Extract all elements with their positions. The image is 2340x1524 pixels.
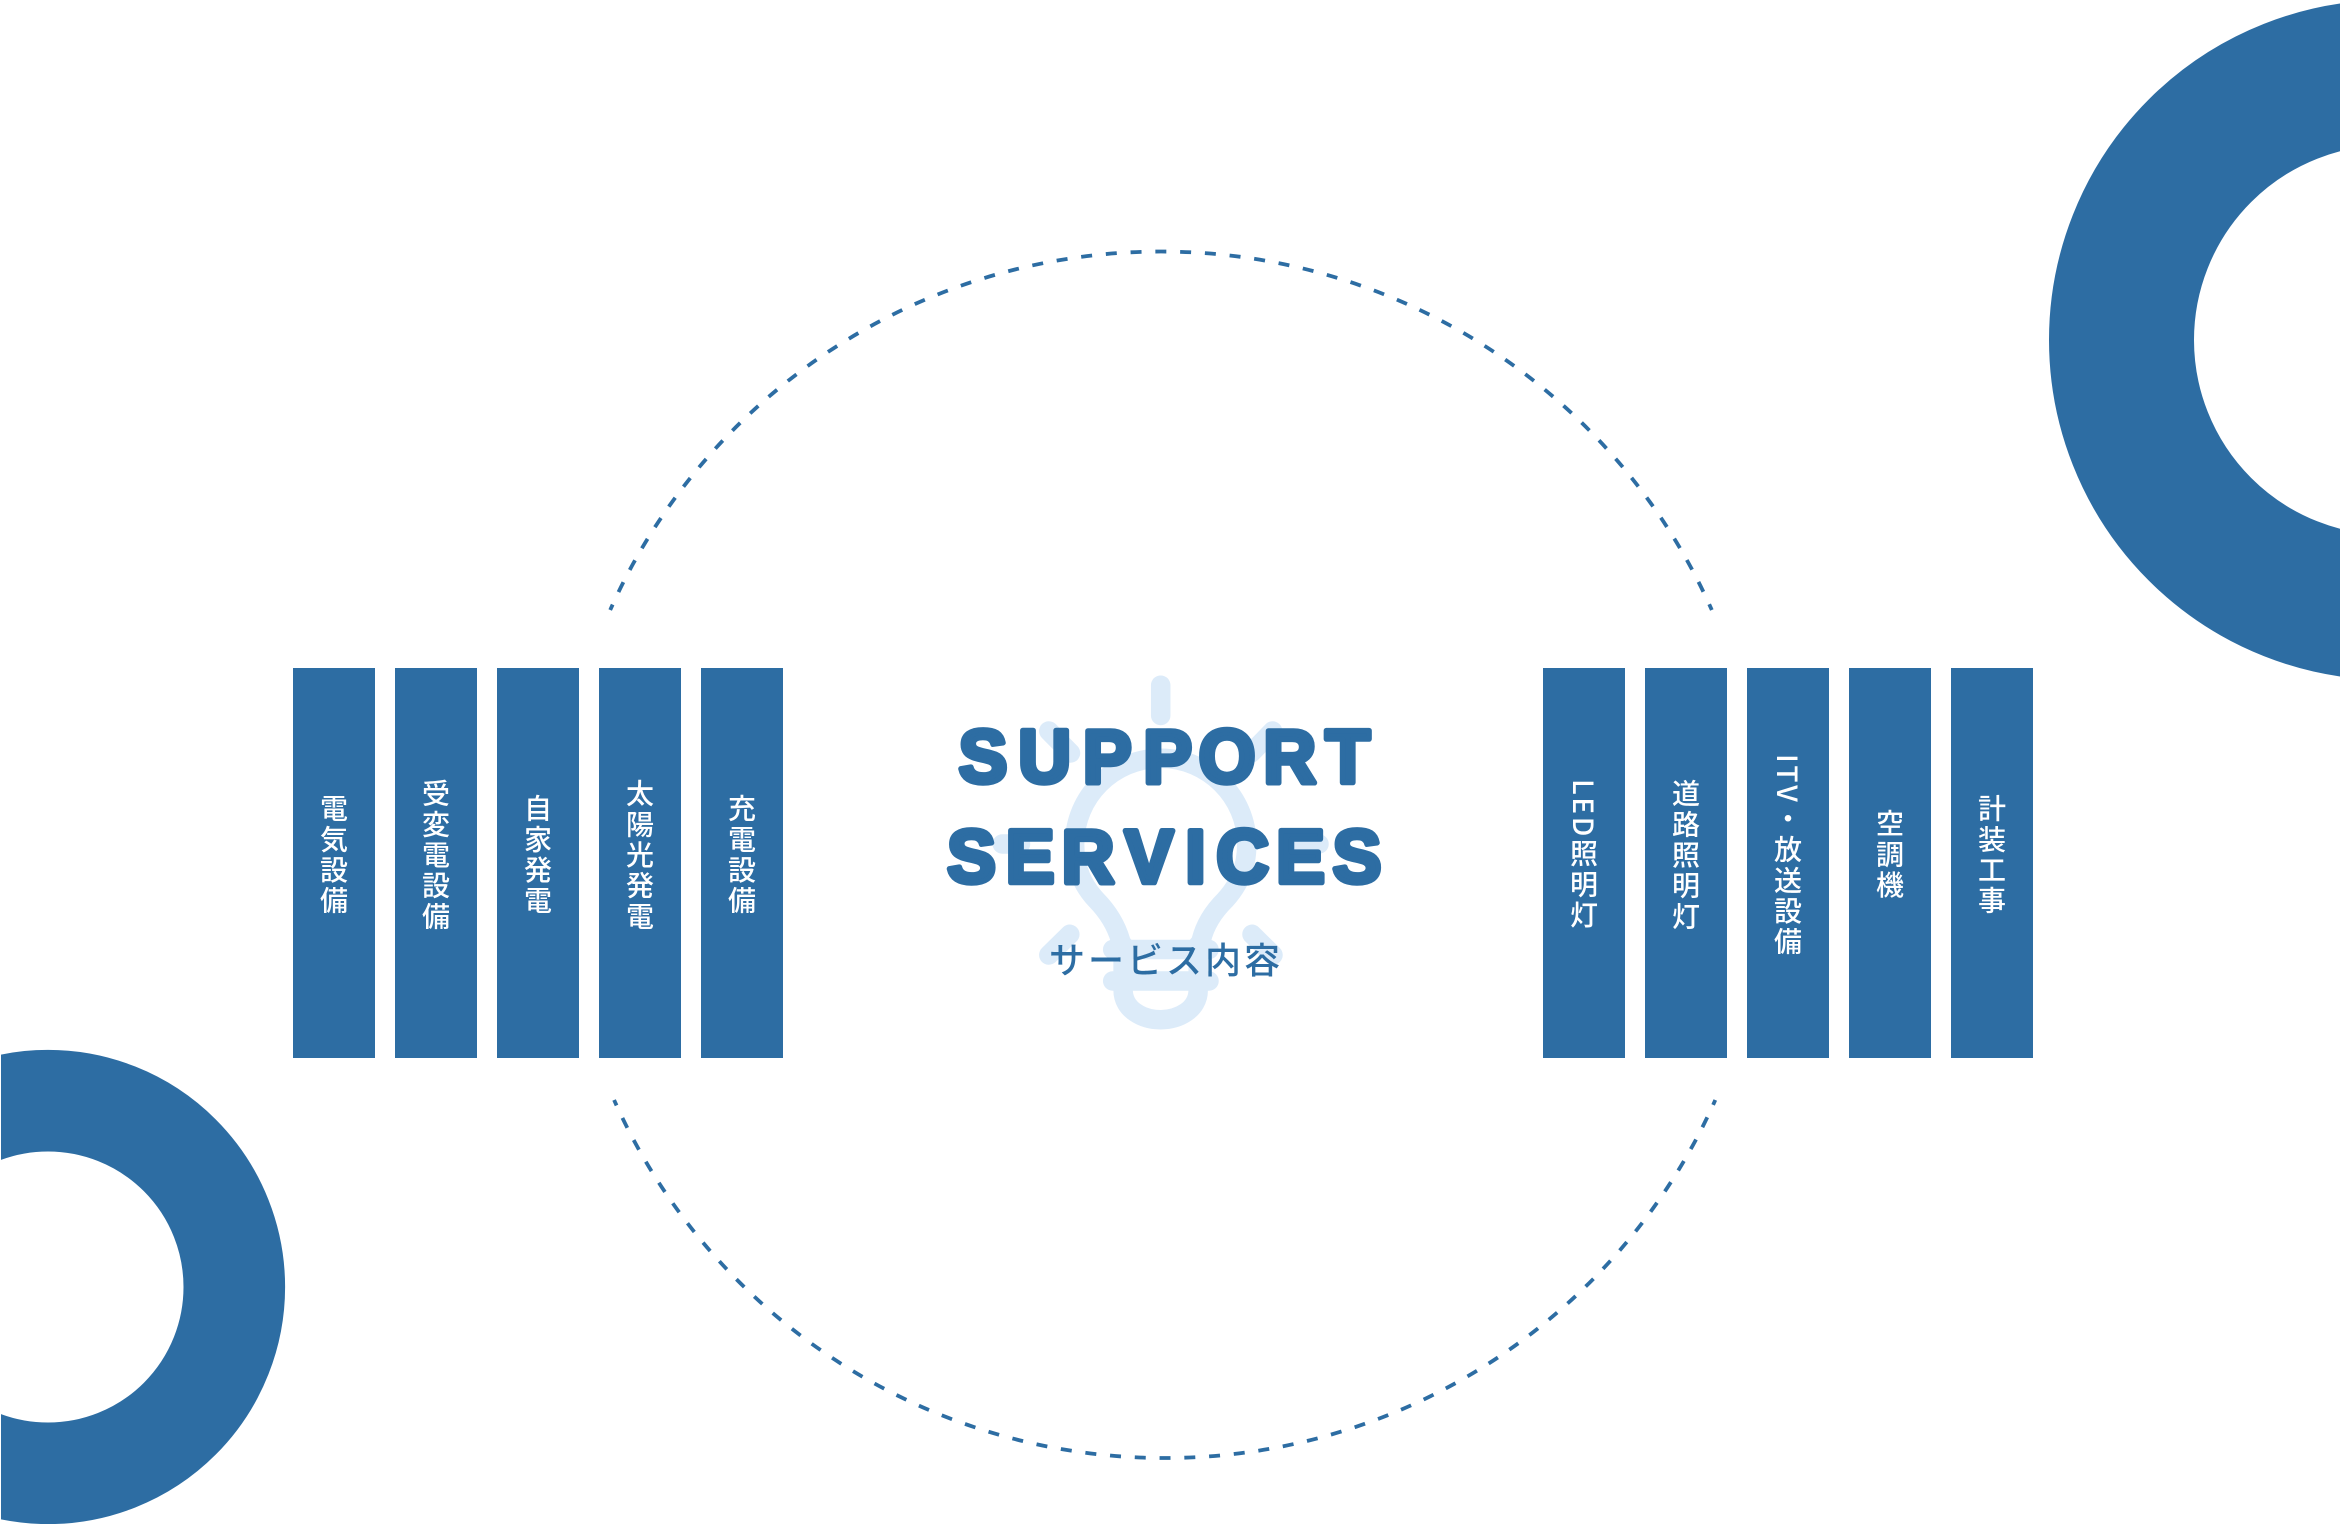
- bar: 空調機: [1849, 668, 1931, 1058]
- bar: 受変電設備: [395, 668, 477, 1058]
- decorative ring: bottom left: [0, 1101, 234, 1473]
- bar: 道路照明灯: 道路照明灯: [1666, 779, 1706, 932]
- bar: 自家発電: [497, 668, 579, 1058]
- panel: right service bars: [1543, 668, 2033, 1058]
- bar: LED照明灯: LED照明灯: [1564, 779, 1604, 932]
- icon: light bulb: [1002, 685, 1319, 1020]
- bar: ITV・放送設備: ITV・放送設備: [1768, 754, 1808, 957]
- bar: ITV・放送設備: [1747, 668, 1829, 1058]
- bar: 計装工事: 計装工事: [1972, 794, 2012, 917]
- title: SERVICES: SERVICES: [947, 814, 1381, 899]
- subtitle: サービス内容: [1049, 940, 1283, 981]
- bar: 道路照明灯: [1645, 668, 1727, 1058]
- bar: 自家発電: 自家発電: [518, 794, 558, 917]
- bar: LED照明灯: [1543, 668, 1625, 1058]
- bar: 充電設備: [701, 668, 783, 1058]
- bar: 太陽光発電: [599, 668, 681, 1058]
- bar: 充電設備: 充電設備: [722, 794, 762, 917]
- decorative ring: top right: [2122, 72, 2340, 608]
- bar: 計装工事: [1951, 668, 2033, 1058]
- dashed arc: top: [610, 252, 1712, 610]
- dashed arc: bottom: [614, 1100, 1715, 1458]
- bar: 電気設備: [293, 668, 375, 1058]
- bar: 受変電設備: 受変電設備: [416, 779, 456, 932]
- title: SUPPORT: SUPPORT: [959, 714, 1370, 799]
- bar: 電気設備: 電気設備: [314, 794, 354, 917]
- bar: 空調機: 空調機: [1870, 809, 1910, 902]
- bar: 太陽光発電: 太陽光発電: [620, 779, 660, 932]
- panel: left service bars: [293, 668, 783, 1058]
